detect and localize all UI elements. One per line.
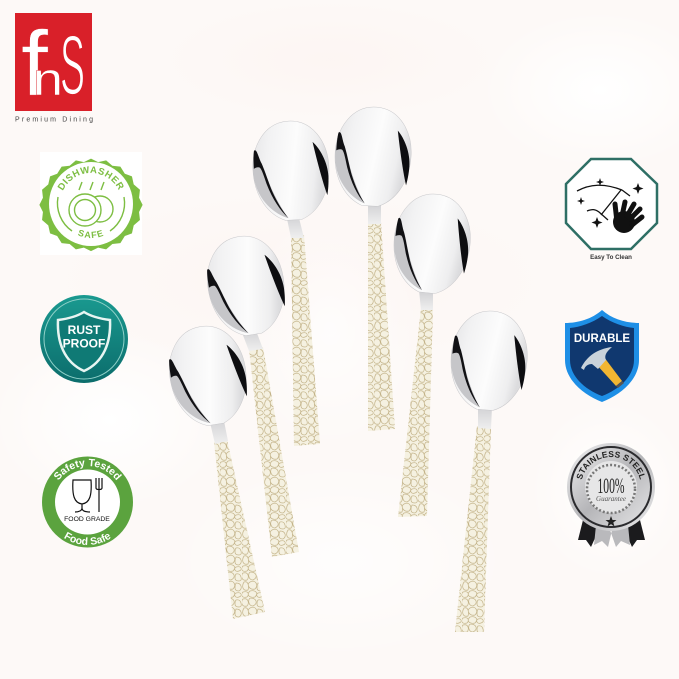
- spoon: back centre left: [250, 119, 332, 446]
- spoon: front right: [447, 308, 531, 632]
- icon: rust proof: PROOF: [63, 336, 105, 350]
- icon: food safe: Food Safe: [64, 532, 110, 545]
- icon: dishwasher safe: DISHWASHER: [58, 166, 124, 190]
- icon: food safe: [42, 456, 133, 548]
- icon: dishwasher safe: [39, 158, 143, 255]
- spoon: middle right: [389, 190, 475, 517]
- icon: dishwasher safe: SAFE: [78, 230, 104, 238]
- icon: durable: [565, 310, 639, 402]
- icon: rust proof: RUST: [68, 323, 101, 337]
- logo: FNS Premium Dining: Premium Dining: [15, 116, 93, 124]
- icon: stainless steel guarantee: Guarantee: [596, 495, 626, 503]
- icon: durable: DURABLE: [574, 333, 630, 345]
- icon: easy to clean: [566, 159, 657, 261]
- icon: easy to clean: Easy To Clean: [590, 254, 632, 261]
- logo: FNS Premium Dining: [15, 13, 93, 124]
- logo: FNS Premium Dining: f: [21, 13, 48, 115]
- icon: stainless steel guarantee: [567, 443, 655, 547]
- spoon: middle left: [201, 231, 299, 557]
- icon: rust proof: [40, 295, 128, 383]
- icon: stainless steel guarantee: 100%: [598, 473, 624, 498]
- spoon: back centre right: [332, 104, 414, 431]
- logo: FNS Premium Dining: S: [60, 18, 85, 112]
- icon: food safe: FOOD GRADE: [64, 516, 110, 523]
- spoon: front left: [163, 321, 265, 619]
- icon: food safe: Safety Tested: [54, 458, 122, 480]
- icon: stainless steel guarantee: STAINLESS STEEL: [576, 451, 645, 480]
- logo: FNS Premium Dining: n: [33, 53, 63, 105]
